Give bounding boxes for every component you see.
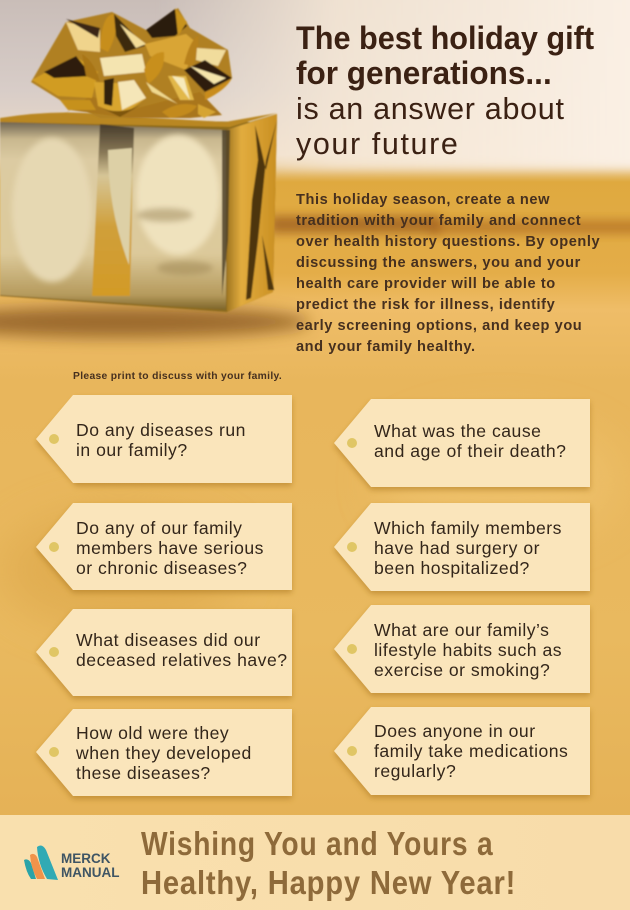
intro text: health care provider will be able to <box>296 276 556 292</box>
icon: tag 3 <box>36 609 292 699</box>
panel: footer band <box>0 815 630 910</box>
question 2: Do any of our family <box>76 518 242 538</box>
question 4: How old were they <box>76 723 229 743</box>
icon: tag 6 <box>334 503 590 594</box>
question 7 <box>374 620 562 680</box>
intro text: predict the risk for illness, identify <box>296 297 555 313</box>
question 3 <box>76 630 288 670</box>
question 8: family take medications <box>374 741 568 761</box>
question 4: these diseases? <box>76 763 211 783</box>
icon: tag 4 <box>36 709 292 799</box>
intro text: and your family healthy. <box>296 339 476 355</box>
title: for generations... <box>296 55 552 91</box>
intro text: early screening options, and keep you <box>296 318 582 334</box>
footer message: Wishing You and Yours a <box>141 825 493 862</box>
question 2 <box>76 518 264 578</box>
footer message <box>141 825 516 901</box>
question 7: lifestyle habits such as <box>374 640 562 660</box>
question 5 <box>374 421 566 461</box>
subtitle: your future <box>296 127 459 161</box>
question 7: exercise or smoking? <box>374 660 550 680</box>
question 8 <box>374 721 568 781</box>
intro text: discussing the answers, you and your <box>296 255 581 271</box>
question 6 <box>374 518 562 578</box>
intro text: This holiday season, create a new <box>296 192 550 208</box>
question 1 <box>76 420 246 460</box>
question 1: in our family? <box>76 440 188 460</box>
intro text: tradition with your family and connect <box>296 213 581 229</box>
question 3: What diseases did our <box>76 630 261 650</box>
question 5: and age of their death? <box>374 441 566 461</box>
icon: Merck Manual logo <box>24 846 58 880</box>
icon: tag 8 <box>334 707 590 798</box>
subtitle: is an answer about <box>296 92 565 126</box>
icon: tag 2 <box>36 503 292 593</box>
question 5: What was the cause <box>374 421 541 441</box>
icon: gold bow <box>31 8 232 118</box>
icon: tag 1 <box>36 395 292 486</box>
logo text: MERCK <box>61 851 110 866</box>
question 2: members have serious <box>76 538 264 558</box>
question 6: been hospitalized? <box>374 558 530 578</box>
question 8: regularly? <box>374 761 456 781</box>
title: The best holiday gift <box>296 20 594 56</box>
question 4: when they developed <box>76 743 252 763</box>
logo text: MANUAL <box>61 865 120 880</box>
icon: tag 5 <box>334 399 590 490</box>
icon: tag 7 <box>334 605 590 696</box>
question 8: Does anyone in our <box>374 721 536 741</box>
title <box>296 20 594 91</box>
question 6: have had surgery or <box>374 538 540 558</box>
icon: gift box <box>0 112 277 312</box>
question 3: deceased relatives have? <box>76 650 288 670</box>
logo text <box>61 851 120 880</box>
footer message: Healthy, Happy New Year! <box>141 864 516 900</box>
question 6: Which family members <box>374 518 562 538</box>
question 2: or chronic diseases? <box>76 558 247 578</box>
question 4 <box>76 723 252 783</box>
intro text <box>296 192 600 355</box>
question 7: What are our family’s <box>374 620 549 640</box>
subtitle <box>296 92 565 161</box>
print note: Please print to discuss with your family. <box>73 371 282 382</box>
question 1: Do any diseases run <box>76 420 246 440</box>
intro text: over health history questions. By openly <box>296 234 600 250</box>
